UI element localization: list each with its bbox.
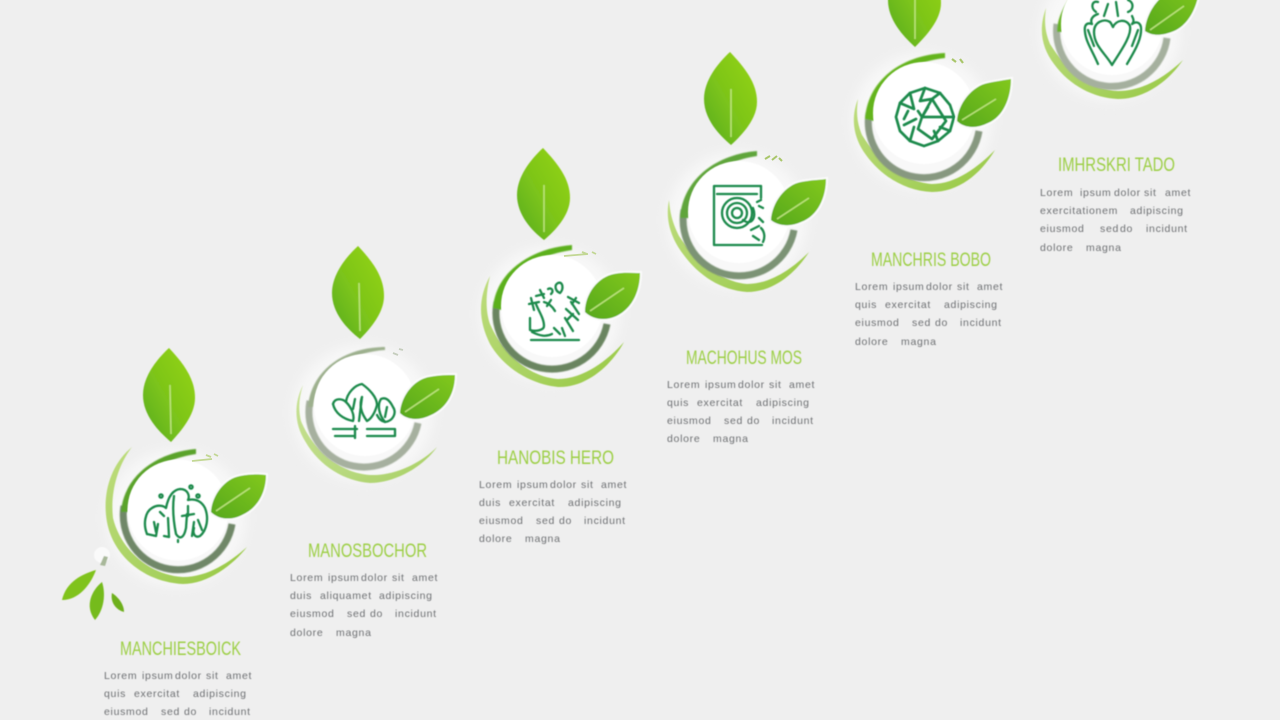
step 1: elephant icon medallion <box>106 348 266 586</box>
small specks <box>765 156 782 161</box>
body text: adipiscing <box>756 397 810 409</box>
step 2 label <box>290 541 438 639</box>
body text: magna <box>713 433 749 445</box>
white disc <box>873 62 975 164</box>
body text: duis <box>290 590 312 602</box>
step 5 label <box>855 250 1003 348</box>
step 1 label <box>104 639 252 718</box>
body text: incidunt <box>1146 223 1188 235</box>
small specks <box>564 252 596 256</box>
body text: sed <box>347 608 366 620</box>
step 3: tree icon medallion <box>480 148 640 387</box>
body text: amet <box>226 670 252 682</box>
body text: adipiscing <box>193 688 247 700</box>
body text: Lorem <box>1040 187 1073 199</box>
body text: incidunt <box>772 415 814 427</box>
body text: sit <box>1144 187 1157 199</box>
heading: MANOSBOCHOR <box>308 541 427 562</box>
body text: sit <box>769 379 782 391</box>
icon: document with spiral <box>714 186 764 245</box>
body text: sed <box>536 515 555 527</box>
body text: ipsum <box>142 670 174 682</box>
body text: quis <box>104 688 126 700</box>
body text: amet <box>412 572 438 584</box>
body text: dolor <box>175 670 202 682</box>
body text: dolor <box>926 281 953 293</box>
side leaf <box>771 179 826 225</box>
white disc <box>688 161 790 263</box>
outer crescent arc <box>854 99 995 192</box>
small specks <box>192 454 218 461</box>
leaf two <box>90 582 104 620</box>
body text: sed <box>724 415 743 427</box>
body text: eiusmod <box>855 317 900 329</box>
droplet <box>94 547 110 563</box>
step 4 label <box>667 348 815 445</box>
soft glow <box>852 53 992 189</box>
body text: do <box>747 415 760 427</box>
heading: MANCHRIS BOBO <box>871 250 991 271</box>
body text: Lorem <box>290 572 323 584</box>
body text: dolore <box>479 533 512 545</box>
body text: eiusmod <box>290 608 335 620</box>
leaf three <box>112 593 124 612</box>
step 6 label <box>1040 155 1191 254</box>
body text: incidunt <box>209 706 251 718</box>
top leaf <box>332 246 384 339</box>
body text: eiusmod <box>104 706 149 718</box>
body text: Lorem <box>104 670 137 682</box>
icon: globe <box>896 88 954 146</box>
body text: ipsum <box>1080 187 1112 199</box>
heading: MACHOHUS MOS <box>686 348 802 369</box>
inner ring <box>865 53 979 178</box>
body text: magna <box>525 533 561 545</box>
droplet stem <box>100 556 108 566</box>
body text: exercitat <box>134 688 180 700</box>
side leaf <box>585 273 640 319</box>
step 6: hands and heart icon medallion <box>1040 0 1200 100</box>
body text <box>855 281 1003 348</box>
leaf one <box>62 570 96 600</box>
body text: amet <box>601 479 627 491</box>
step 4: document icon medallion <box>667 52 826 292</box>
soft glow <box>1040 0 1180 100</box>
soft glow <box>667 152 807 288</box>
body text: sed <box>1100 223 1119 235</box>
inner ring <box>308 347 418 467</box>
body text: sit <box>581 479 594 491</box>
body text: sit <box>206 670 219 682</box>
body text: dolor <box>738 379 765 391</box>
body text: do <box>1120 223 1133 235</box>
body text: quis <box>855 299 877 311</box>
body text: ipsum <box>893 281 925 293</box>
body text <box>104 670 252 718</box>
top leaf <box>704 52 757 145</box>
body text: eiusmod <box>1040 223 1085 235</box>
step 3 label <box>479 448 627 545</box>
body text: incidunt <box>960 317 1002 329</box>
body text: ipsum <box>517 479 549 491</box>
outer crescent arc <box>296 385 437 483</box>
body text: duis <box>479 497 501 509</box>
white disc <box>501 255 603 357</box>
body text: sed <box>161 706 180 718</box>
body text: exercitat <box>697 397 743 409</box>
body text: dolor <box>1114 187 1141 199</box>
body text: amet <box>977 281 1003 293</box>
small specks <box>393 349 403 355</box>
body text: Lorem <box>855 281 888 293</box>
step 2: plants icon medallion <box>293 246 455 483</box>
body text: amet <box>1165 187 1191 199</box>
body text: do <box>184 706 197 718</box>
white disc <box>1061 0 1163 75</box>
body text <box>667 379 815 445</box>
body text: do <box>370 608 383 620</box>
soft glow <box>480 246 620 382</box>
top leaf <box>888 0 941 47</box>
body text: incidunt <box>395 608 437 620</box>
body text: sit <box>957 281 970 293</box>
outer crescent arc <box>668 200 809 292</box>
body text: ipsum <box>705 379 737 391</box>
body text: eiusmod <box>667 415 712 427</box>
side leaf <box>211 474 266 519</box>
heading: HANOBIS HERO <box>497 448 614 469</box>
outer crescent arc <box>106 447 247 584</box>
icon: tree <box>529 283 579 340</box>
body text: sit <box>392 572 405 584</box>
body text: sed <box>912 317 931 329</box>
body text: adipiscing <box>379 590 433 602</box>
step 5: globe icon medallion <box>852 0 1011 192</box>
side leaf <box>400 375 455 419</box>
body text: ipsum <box>328 572 360 584</box>
body text <box>1040 187 1191 254</box>
icon: hands holding heart <box>1085 0 1141 65</box>
body text: dolore <box>1040 242 1073 254</box>
body text: adipiscing <box>944 299 998 311</box>
heading: MANCHIESBOICK <box>120 639 241 660</box>
body text: do <box>559 515 572 527</box>
side leaf <box>957 79 1011 127</box>
body text: Lorem <box>479 479 512 491</box>
heading: IMHRSKRI TADO <box>1058 155 1175 176</box>
soft glow <box>106 450 246 586</box>
white disc <box>314 354 416 456</box>
body text: dolor <box>550 479 577 491</box>
small specks <box>952 59 963 63</box>
body text: eiusmod <box>479 515 524 527</box>
body text: quis <box>667 397 689 409</box>
body text: aliquamet <box>320 590 372 602</box>
inner ring <box>1057 0 1167 86</box>
top leaf <box>517 148 570 240</box>
soft glow <box>293 345 433 481</box>
body text: adipiscing <box>568 497 622 509</box>
icon: elephants <box>145 485 207 542</box>
falling small leaves <box>62 547 124 620</box>
body text: exercitat <box>885 299 931 311</box>
body text: magna <box>336 627 372 639</box>
body text: magna <box>1086 242 1122 254</box>
body text <box>479 479 627 545</box>
body text: amet <box>789 379 815 391</box>
top leaf <box>143 348 195 442</box>
body text: dolor <box>361 572 388 584</box>
side leaf <box>1145 0 1200 35</box>
inner ring <box>121 449 232 570</box>
body text <box>290 572 438 639</box>
body text: dolore <box>290 627 323 639</box>
icon: plants <box>333 384 395 438</box>
outer crescent arc <box>481 276 624 387</box>
white disc <box>128 460 228 560</box>
body text: exercitat <box>509 497 555 509</box>
body text: dolore <box>855 336 888 348</box>
body text: incidunt <box>584 515 626 527</box>
inner ring <box>493 245 607 369</box>
body text: Lorem <box>667 379 700 391</box>
body text: do <box>935 317 948 329</box>
body text: dolore <box>667 433 700 445</box>
body text: adipiscing <box>1130 205 1184 217</box>
inner ring <box>680 151 794 276</box>
body text: magna <box>901 336 937 348</box>
body text: exercitationem <box>1040 205 1118 217</box>
outer crescent arc <box>1042 8 1183 99</box>
